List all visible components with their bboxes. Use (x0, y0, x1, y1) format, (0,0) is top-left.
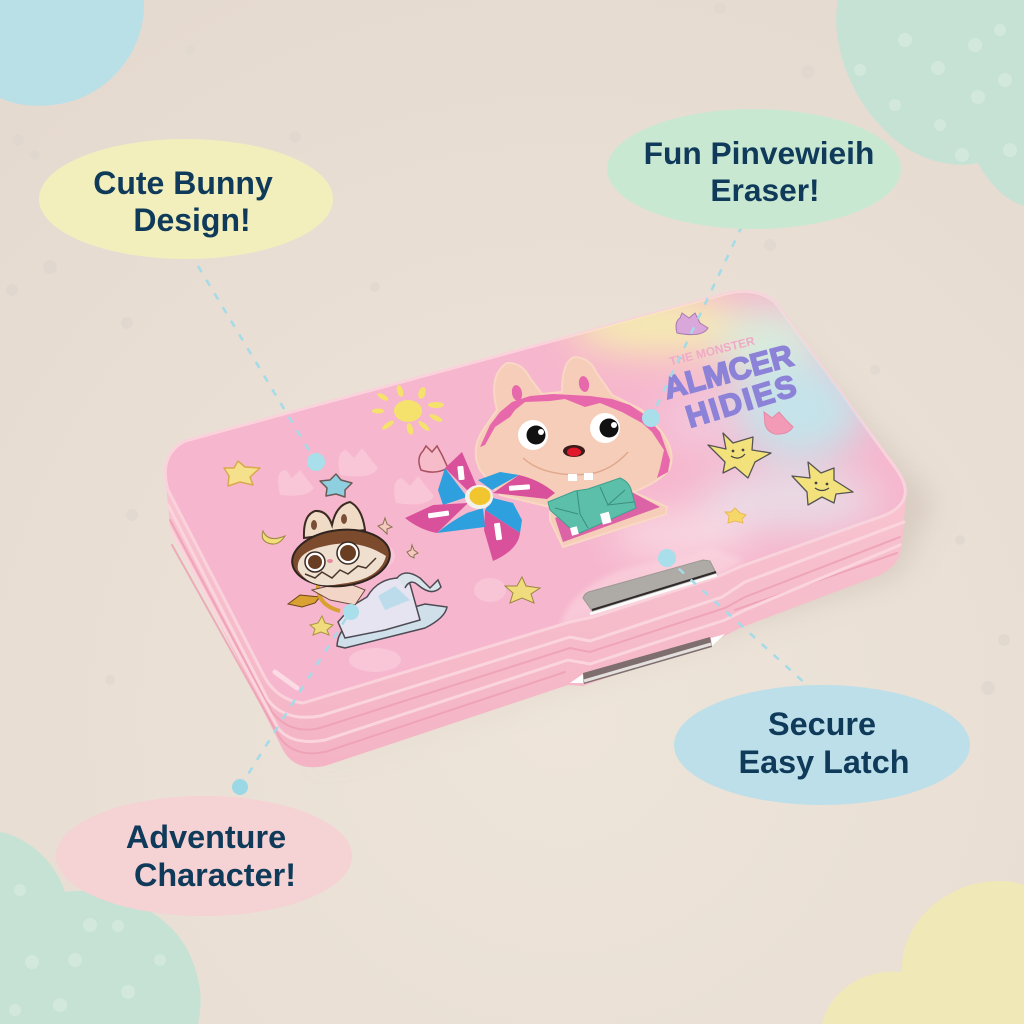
callout: cute bunny design: Cute Bunny (93, 165, 273, 201)
callout: secure easy latch: Secure (768, 706, 876, 742)
bunny pink collar (555, 490, 660, 542)
icon: smiling stars (708, 433, 853, 523)
icon: small bunny stickers (419, 313, 793, 472)
leader: latch (658, 549, 808, 686)
bunny base outline (476, 357, 672, 547)
bunny inner ears (511, 384, 523, 402)
callout: cute bunny design (39, 139, 333, 259)
callout: adventure character: Character! (134, 857, 296, 893)
callout: adventure character: Adventure (126, 819, 286, 855)
leader: bunny design (198, 266, 325, 471)
lid colour wash (275, 297, 880, 688)
lid corner highlight (275, 672, 297, 688)
bunny eyes (518, 420, 548, 450)
callout: cute bunny design: Design! (133, 202, 251, 238)
upper latch plate (583, 560, 717, 612)
bunny fur (480, 394, 670, 478)
background blob: bottom left green (0, 832, 201, 1024)
case lid (165, 291, 905, 703)
callout: adventure character (56, 796, 352, 916)
leader: pinwheel eraser (642, 226, 742, 427)
background blob: bottom right yellow (822, 881, 1024, 1024)
case body sides (165, 475, 906, 767)
lid latch recess (562, 554, 740, 622)
leader: adventure character (232, 604, 359, 795)
bunny bow (548, 478, 636, 533)
callout: secure easy latch (674, 685, 970, 805)
latch (570, 560, 725, 684)
callout: fun pinwheel eraser: Fun Pinvewieih (644, 135, 874, 171)
pencil case (165, 291, 935, 770)
printed title (660, 334, 802, 435)
character: bunny (476, 357, 672, 547)
case shadow (300, 320, 935, 770)
callout: fun pinwheel eraser: Eraser! (710, 172, 820, 208)
bunny smile (523, 452, 628, 475)
bunny nose (563, 445, 585, 457)
icon: pinwheel (405, 452, 555, 561)
character: adventure creature (288, 502, 447, 648)
icon: sun (372, 384, 444, 436)
lower latch bar (583, 637, 712, 684)
callout: secure easy latch: Easy Latch (738, 744, 910, 780)
printed title: ALMCER (660, 338, 797, 406)
faint lid bunnies (278, 448, 506, 672)
background blob: top left blue (0, 0, 144, 106)
printed title: THE MONSTER (668, 334, 756, 368)
background blob: top right green (836, 0, 1024, 206)
callout: fun pinwheel eraser (607, 109, 901, 229)
background dots (6, 2, 1010, 695)
icon: stars and moon (224, 461, 540, 635)
side ridges (168, 505, 904, 753)
printed title: HIDIES (682, 367, 802, 435)
